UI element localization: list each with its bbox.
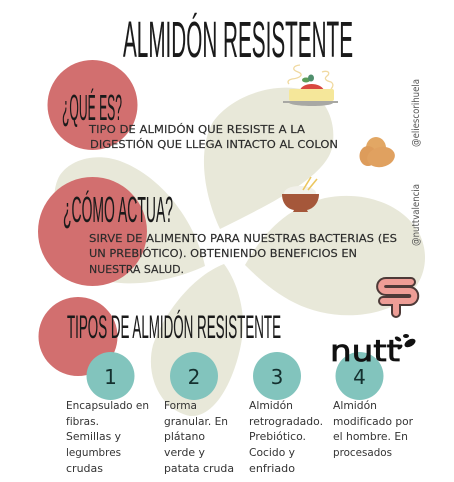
text: qué es: TIPO DE ALMIDÓN QUE RESISTE A LA	[88, 123, 306, 136]
logo: nutt	[330, 334, 417, 368]
panel: qué es: ¿QUÉ ES?	[62, 87, 122, 128]
text: qué es	[88, 123, 338, 151]
type 1: legumbres	[66, 446, 121, 459]
icon: intestine	[381, 282, 414, 313]
panel: cómo actúa	[38, 177, 397, 286]
panel: qué es	[48, 60, 338, 151]
type 4: 4	[353, 365, 366, 389]
icon: rice bowl	[282, 177, 319, 212]
text: cómo actúa: SIRVE DE ALIMENTO PARA NUESTRAS BACTERIAS (ES	[89, 233, 397, 245]
flower background	[54, 88, 425, 416]
type 2: granular. En	[164, 415, 228, 428]
red circle: cómo actúa	[38, 177, 147, 286]
type 1: Encapsulado en	[66, 399, 149, 412]
type 1	[66, 352, 149, 475]
type 4: Almidón	[333, 399, 377, 412]
type 1: fibras.	[66, 415, 99, 428]
type 3: enfriado	[249, 462, 295, 475]
type 4	[333, 352, 413, 459]
panel: cómo actúa: ¿CÓMO ACTUA?	[63, 189, 173, 230]
type 3: Cocido y	[249, 446, 295, 459]
type 4: modificado por	[333, 415, 413, 428]
type 1: Semillas y	[66, 430, 121, 443]
type 3: 3	[271, 365, 283, 389]
type 3	[249, 352, 323, 475]
type 2: 2	[188, 365, 200, 389]
type 3: Prebiótico.	[249, 430, 306, 443]
type 2: Forma	[164, 399, 197, 412]
text: qué es: DIGESTIÓN QUE LLEGA INTACTO AL COLON	[90, 138, 338, 151]
type 2: patata cruda	[164, 462, 234, 475]
type 2: verde y	[164, 446, 205, 459]
text: cómo actúa: NUESTRA SALUD.	[89, 264, 184, 276]
icon: pasta plate	[283, 65, 338, 106]
type 4: procesados	[333, 446, 392, 459]
type 3: retrogradado.	[249, 415, 323, 428]
logo: nutt: nutt	[330, 334, 400, 368]
text: cómo actúa: UN PREBIÓTICO). OBTENIENDO BENEFICIOS EN	[89, 247, 357, 260]
type 1: 1	[104, 365, 117, 389]
type 3: Almidón	[249, 399, 293, 412]
type 1: crudas	[66, 462, 103, 475]
red circle: qué es	[48, 60, 138, 150]
type 4: el hombre. En	[333, 430, 408, 443]
text: cómo actúa	[89, 233, 397, 276]
icon: potatoes	[360, 137, 397, 170]
type 2	[164, 352, 234, 475]
handle: eliescorihuela: @eliescorihuela	[411, 79, 422, 147]
red circle: tipos	[38, 297, 118, 376]
type 2: plátano	[164, 430, 205, 443]
handle: nuttvalencia: @nuttvalencia	[411, 184, 422, 246]
panel: tipos	[38, 297, 413, 475]
